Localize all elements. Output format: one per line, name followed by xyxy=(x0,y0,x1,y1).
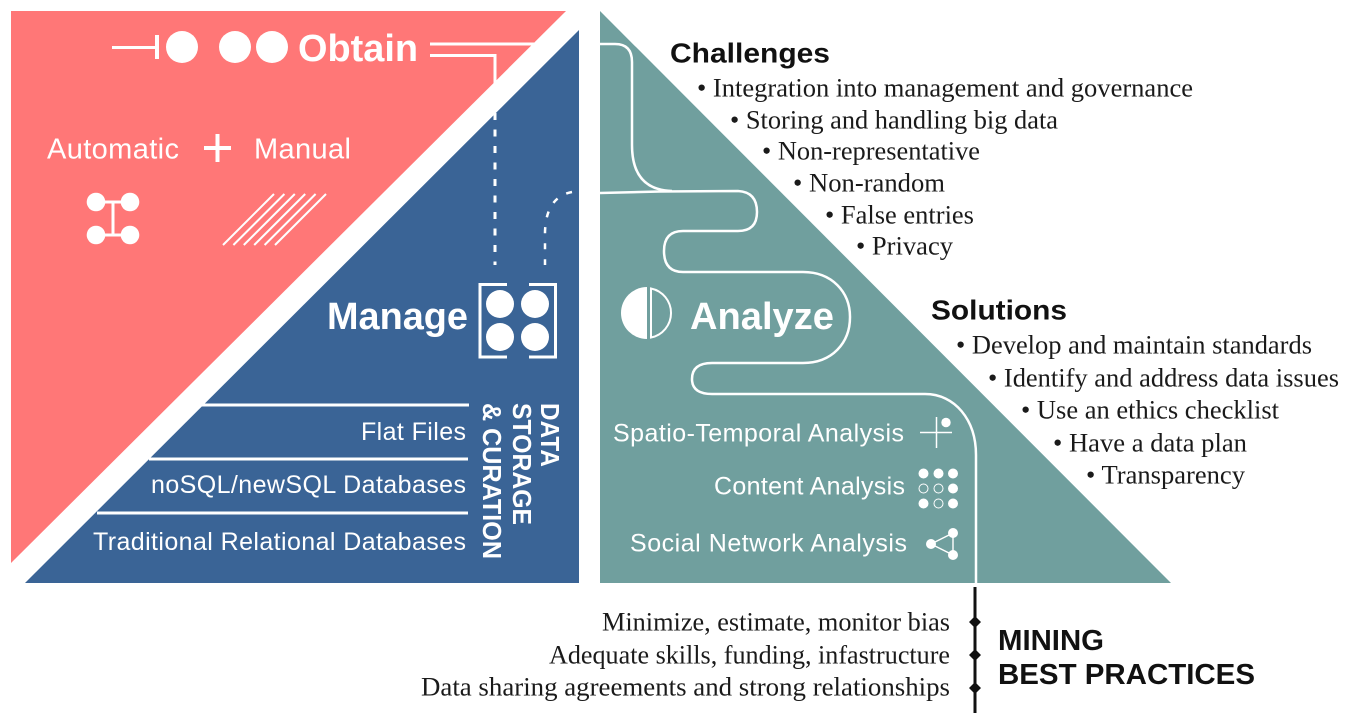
connector lines: obtain xyxy=(430,44,534,84)
text block: solutions xyxy=(931,294,1339,490)
text block: challenges: • False entries xyxy=(825,200,974,230)
rotated heading: data storage and curation xyxy=(477,403,565,559)
practice list xyxy=(421,608,950,702)
heading: obtain: Obtain xyxy=(298,28,418,70)
icon: automatic xyxy=(87,193,139,244)
timeline: mining best practices xyxy=(421,587,1255,713)
text block: challenges: • Integration into management and governance xyxy=(697,74,1193,102)
text block: challenges xyxy=(670,38,1193,260)
label: social network: Social Network Analysis xyxy=(630,530,907,558)
rotated heading: data storage and curation: STORAGE xyxy=(507,403,537,525)
text block: challenges: • Storing and handling big data xyxy=(730,106,1058,134)
heading: mining best practices xyxy=(998,625,1255,691)
label: nosql: noSQL/newSQL Databases xyxy=(151,471,466,499)
text block: solutions: • Develop and maintain standards xyxy=(956,330,1312,360)
rotated heading: data storage and curation: DATA xyxy=(535,403,565,467)
practice list: Data sharing agreements and strong relationships xyxy=(421,672,950,702)
heading: mining best practices: BEST PRACTICES xyxy=(998,659,1255,691)
text: manual: Manual xyxy=(254,134,351,166)
flow line xyxy=(600,44,976,583)
text block: solutions: • Have a data plan xyxy=(1053,428,1247,458)
heading: analyze: Analyze xyxy=(690,296,834,338)
text block: challenges: • Privacy xyxy=(856,232,953,260)
text block: solutions: • Use an ethics checklist xyxy=(1021,396,1280,424)
panel: manage xyxy=(25,30,579,583)
connector: dotted lines xyxy=(495,113,572,265)
label: flat files: Flat Files xyxy=(361,418,466,446)
storage list xyxy=(93,405,469,556)
text: automatic: Automatic xyxy=(47,134,179,166)
icon: manual hatching xyxy=(223,194,326,245)
rotated heading: data storage and curation: & CURATION xyxy=(477,403,507,559)
icon: manage xyxy=(480,284,556,357)
icon: network xyxy=(926,528,958,560)
heading: manage: Manage xyxy=(327,296,468,338)
icon: analyze half circles xyxy=(621,287,671,339)
heading: solutions: Solutions xyxy=(931,294,1067,326)
label: spatio-temporal: Spatio-Temporal Analysis xyxy=(613,420,904,448)
panel: analyze xyxy=(600,11,1171,583)
icon: content dots xyxy=(919,469,958,508)
practice list: Minimize, estimate, monitor bias xyxy=(602,608,950,636)
heading: challenges: Challenges xyxy=(670,38,830,68)
heading: mining best practices: MINING xyxy=(998,625,1104,657)
icon: spatio-temporal xyxy=(920,417,952,448)
practice list: Adequate skills, funding, infastructure xyxy=(549,640,950,670)
label: content: Content Analysis xyxy=(714,472,905,500)
text block: solutions: • Identify and address data issues xyxy=(988,364,1339,392)
label: relational: Traditional Relational Databases xyxy=(93,528,466,556)
text block: solutions: • Transparency xyxy=(1086,460,1245,490)
text block: challenges: • Non-representative xyxy=(762,136,980,166)
text block: challenges: • Non-random xyxy=(793,168,945,198)
icon: obtain stage marker xyxy=(112,31,288,63)
icon: plus xyxy=(204,134,231,162)
panel: obtain xyxy=(11,11,566,563)
